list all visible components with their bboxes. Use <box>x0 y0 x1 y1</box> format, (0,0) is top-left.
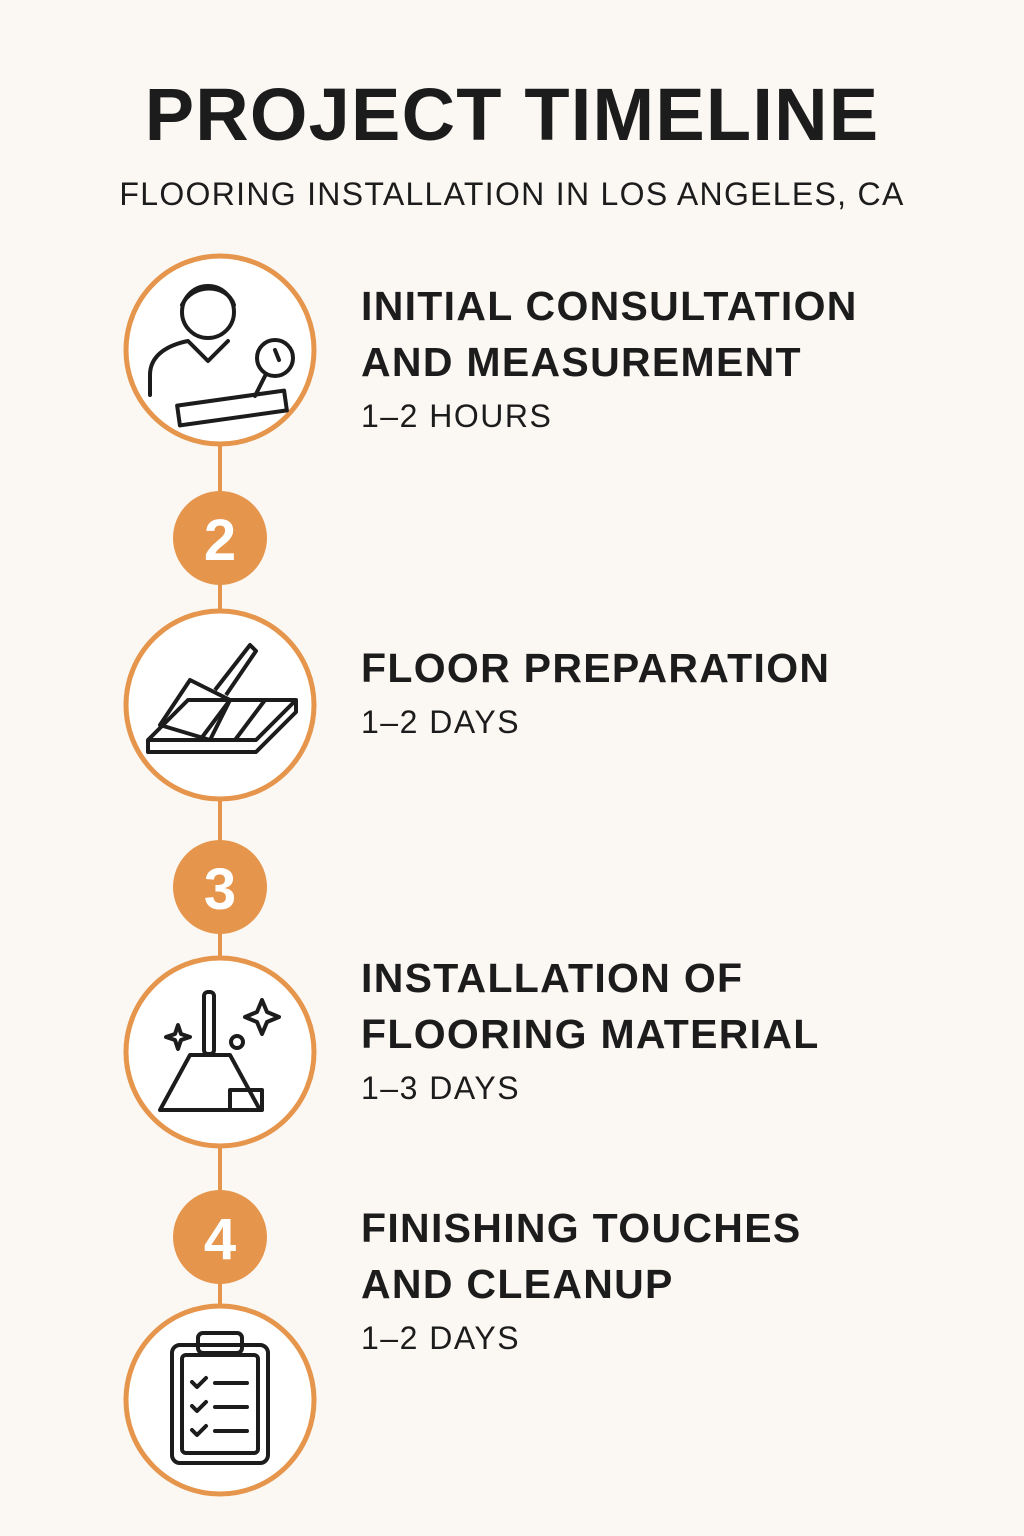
number 2 <box>173 491 267 585</box>
number 3 <box>173 840 267 934</box>
step 1 text: 1–2 HOURS <box>361 398 552 434</box>
step 1 text: INITIAL CONSULTATION <box>361 283 858 329</box>
step 4 text: 1–2 DAYS <box>361 1320 520 1356</box>
number 2: 2 <box>204 508 236 573</box>
number 4: 4 <box>204 1207 236 1272</box>
step 3 text: INSTALLATION OF <box>361 955 743 1001</box>
step 3 text: FLOORING MATERIAL <box>361 1011 820 1057</box>
step 3 text: 1–3 DAYS <box>361 1070 520 1106</box>
step 1 text <box>361 283 858 434</box>
step 4 text <box>361 1205 802 1356</box>
subtitle: FLOORING INSTALLATION IN LOS ANGELES, CA <box>119 176 905 212</box>
step 3 circle icon: broom sparkles <box>126 958 314 1146</box>
step 1 circle icon: person measuring <box>126 256 314 444</box>
step 4 circle icon: clipboard checklist <box>126 1306 314 1494</box>
step 3 text <box>361 955 820 1106</box>
step 2 text: 1–2 DAYS <box>361 704 520 740</box>
step 1 text: AND MEASUREMENT <box>361 339 802 385</box>
step 4 text: AND CLEANUP <box>361 1261 674 1307</box>
number 4 <box>173 1190 267 1284</box>
step 4 text: FINISHING TOUCHES <box>361 1205 802 1251</box>
number 3: 3 <box>204 857 236 922</box>
step 2 circle icon: trowel and floor <box>126 611 314 799</box>
title: PROJECT TIMELINE <box>145 73 879 156</box>
step 2 text <box>361 645 830 740</box>
step 2 text: FLOOR PREPARATION <box>361 645 830 691</box>
